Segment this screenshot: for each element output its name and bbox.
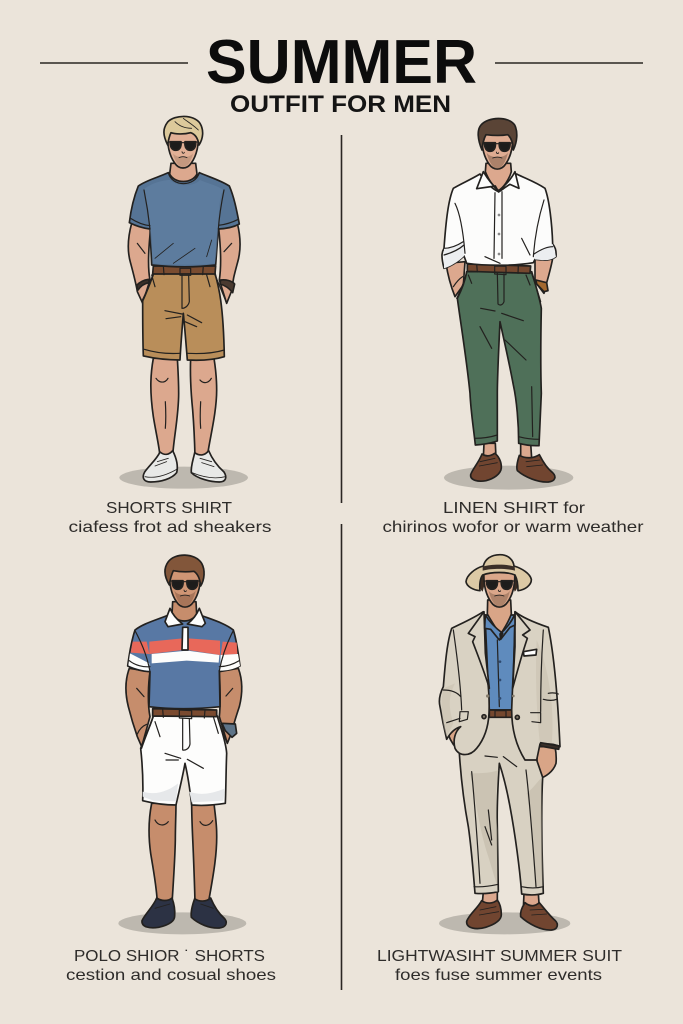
caption: linen shirt: chirinos wofor or warm weather bbox=[382, 519, 644, 536]
figure: striped polo and white shorts bbox=[118, 555, 246, 934]
icon: brown loafer left bbox=[467, 900, 501, 929]
icon: brown loafer right bbox=[517, 455, 555, 482]
caption: linen shirt: LINEN SHIRT for bbox=[443, 500, 586, 517]
figure: t-shirt and khaki shorts bbox=[119, 116, 248, 489]
caption: shorts shirt: SHORTS SHIRT bbox=[106, 500, 232, 517]
title: OUTFIT FOR MEN bbox=[230, 91, 451, 118]
icon: navy shoe right bbox=[191, 898, 226, 928]
icon: brown loafer left bbox=[471, 453, 501, 481]
figure: white linen shirt and green chinos bbox=[442, 118, 573, 490]
caption: shorts shirt bbox=[68, 500, 272, 536]
caption: polo shirt bbox=[66, 948, 276, 984]
caption: lightweight suit: foes fuse summer events bbox=[395, 967, 602, 984]
icon: white sneaker right bbox=[191, 451, 226, 482]
icon: brown loafer right bbox=[521, 903, 557, 930]
figure: lightweight summer suit with hat bbox=[439, 555, 570, 934]
caption: shorts shirt: ciafess frot ad sheakers bbox=[68, 519, 272, 536]
caption: linen shirt bbox=[382, 500, 644, 536]
icon: white sneaker left bbox=[143, 451, 177, 482]
caption: polo shirt: POLO SHIOR ˙ SHORTS bbox=[74, 948, 265, 965]
caption: lightweight suit: LIGHTWASIHT SUMMER SUIT bbox=[377, 948, 622, 965]
caption: polo shirt: cestion and cosual shoes bbox=[66, 967, 276, 984]
caption: lightweight suit bbox=[377, 948, 622, 984]
icon: navy shoe left bbox=[142, 898, 175, 928]
title: SUMMER bbox=[206, 28, 477, 97]
